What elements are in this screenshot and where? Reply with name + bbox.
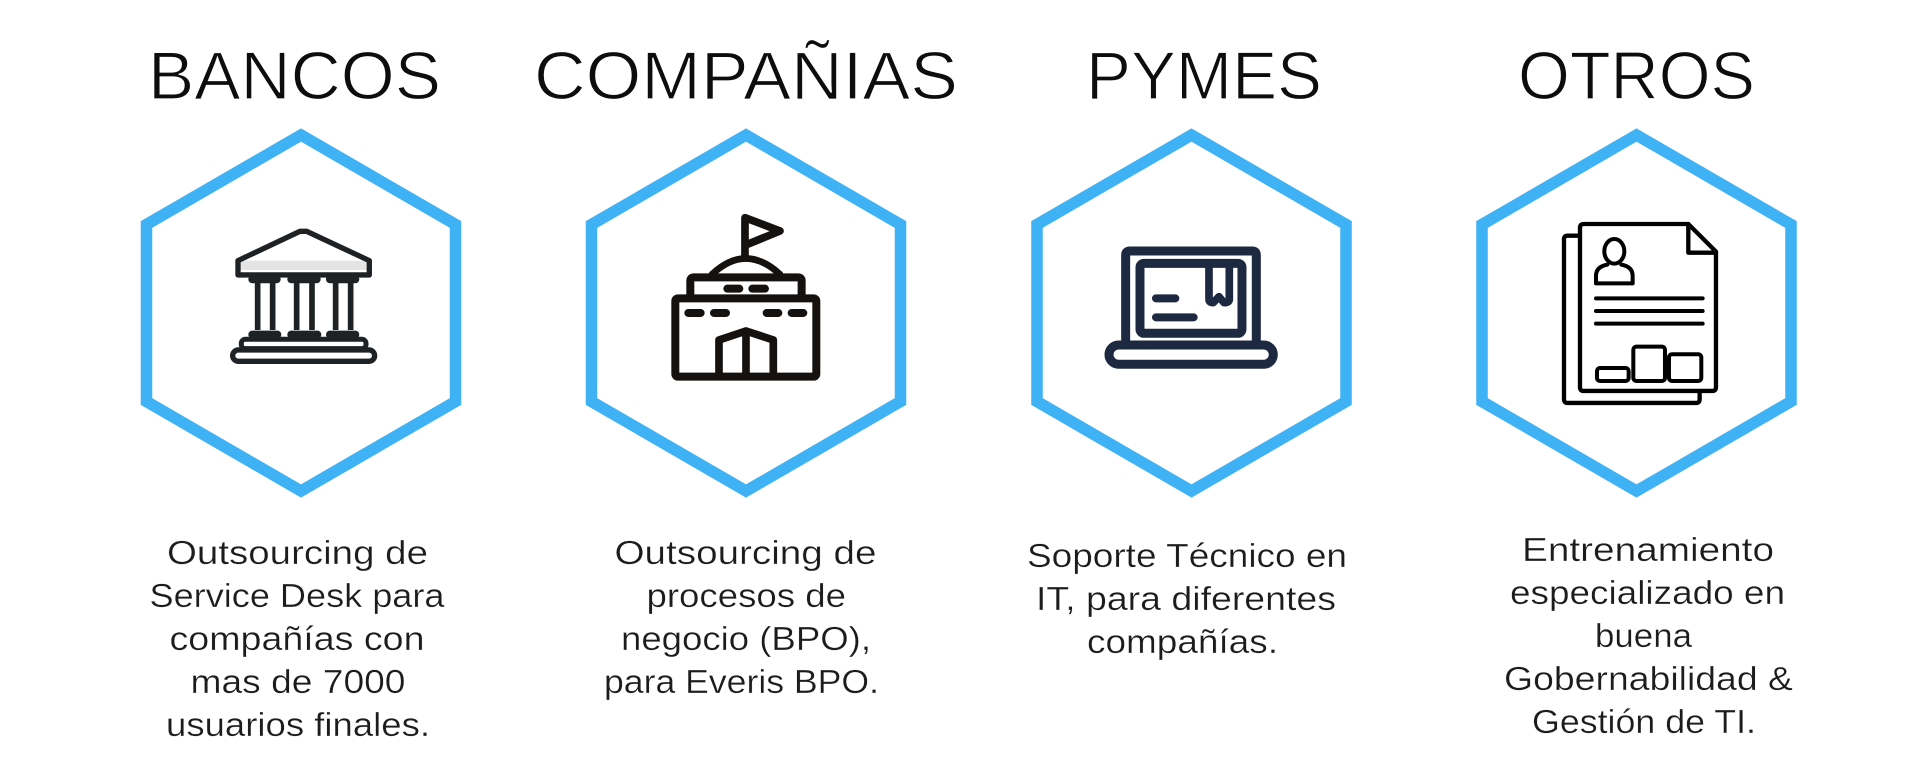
hexagon frame: compañías	[592, 135, 900, 491]
description: compañías	[604, 534, 879, 700]
description: bancos: compañías con	[170, 620, 424, 657]
description: compañías: Outsourcing de	[614, 534, 876, 571]
hexagon frame: pymes	[1037, 135, 1346, 491]
description: compañías: procesos de	[646, 577, 846, 614]
icon: laptop with bookmark	[1109, 251, 1273, 364]
heading: otros: OTROS	[1518, 38, 1755, 114]
description: pymes: compañías.	[1087, 623, 1278, 660]
description: pymes	[1027, 537, 1347, 660]
description: bancos	[150, 534, 445, 743]
description: compañías: para Everis BPO.	[604, 663, 879, 700]
description: bancos: Outsourcing de	[167, 534, 428, 571]
icon: résumé documents	[1564, 224, 1716, 403]
description: otros: Entrenamiento	[1522, 531, 1774, 568]
heading: compañías: COMPAÑIAS	[534, 38, 958, 114]
description: compañías: negocio (BPO),	[621, 620, 871, 657]
panel: otros	[1482, 38, 1793, 740]
panel: compañías	[534, 38, 958, 700]
heading: pymes: PYMES	[1086, 38, 1322, 114]
heading: bancos: BANCOS	[148, 38, 441, 114]
description: otros: buena	[1595, 617, 1693, 654]
description: bancos: usuarios finales.	[166, 706, 430, 743]
description: pymes: IT, para diferentes	[1036, 580, 1336, 617]
hexagon frame: otros	[1482, 135, 1791, 491]
icon: government building with flag	[675, 218, 816, 377]
description: otros: especializado en	[1510, 574, 1785, 611]
description: otros	[1504, 531, 1793, 740]
panel: pymes	[1027, 38, 1347, 660]
icon: bank building	[233, 231, 375, 361]
description: pymes: Soporte Técnico en	[1027, 537, 1347, 574]
hexagon frame: bancos	[146, 135, 456, 491]
description: otros: Gestión de TI.	[1532, 703, 1756, 740]
description: bancos: Service Desk para	[150, 577, 445, 614]
panel: bancos	[146, 38, 456, 743]
description: bancos: mas de 7000	[190, 663, 406, 700]
description: otros: Gobernabilidad &	[1504, 660, 1793, 697]
